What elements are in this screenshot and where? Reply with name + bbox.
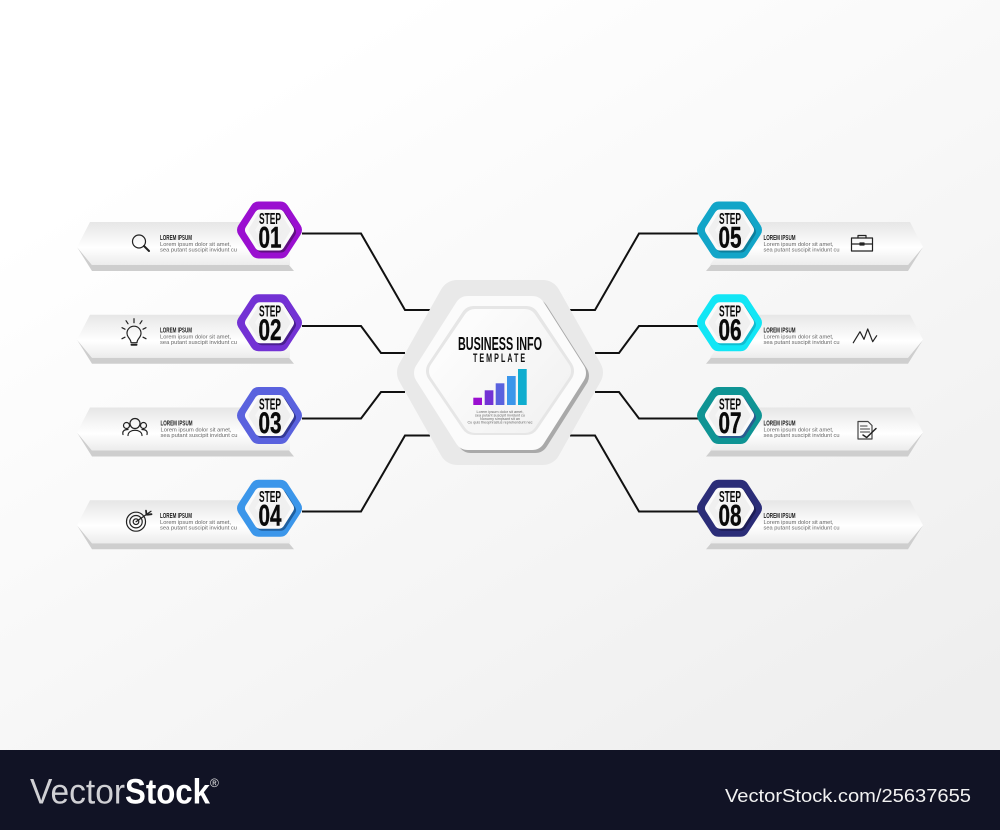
footer url: VectorStock.com/25637655 [725,785,971,806]
text 06: Lorem ipsum dolor sit amet, [764,335,834,341]
hexagon 08: STEP [719,489,741,506]
center title: BUSINESS INFO [458,333,542,354]
hexagon 01 [246,210,294,254]
footer logo: Stock [125,772,210,812]
icon: light bulb [122,319,146,345]
center body text: sea putant suscipit invidunt cu [475,414,525,418]
icon: briefcase [852,236,872,251]
step 08 [706,488,923,549]
banner 01 [77,222,294,271]
step 05 [706,210,923,271]
text 05: LOREM IPSUM [764,233,796,242]
step 01 [77,210,294,271]
text 03: LOREM IPSUM [160,418,192,428]
text 02: sea putant suscipit invidunt cu [160,340,237,346]
icon: checklist document [858,422,876,439]
center subtitle: TEMPLATE [473,352,527,366]
text 06 [764,326,840,346]
text 07: LOREM IPSUM [764,418,796,428]
banner 06 [706,315,923,364]
hexagon 07 [706,396,754,440]
text 05 [764,233,840,254]
hexagon 04: 04 [258,500,282,533]
text 05: sea putant suscipit invidunt cu [764,248,840,254]
text 01 [160,233,237,254]
text 01: Lorem ipsum dolor sit amet, [160,242,231,248]
hexagon 05: STEP [719,211,741,228]
icon: zigzag chart [853,329,877,343]
hexagon 06: 06 [718,314,742,347]
text 02: LOREM IPSUM [160,326,192,335]
footer bar [0,750,1000,830]
bar chart [473,369,527,405]
step 02 [77,303,294,364]
banner 08 [706,500,923,549]
icon: people [123,418,147,436]
text 05: Lorem ipsum dolor sit amet, [764,242,834,248]
text 07: Lorem ipsum dolor sit amet, [764,428,834,434]
banner 04 [77,500,294,549]
text 04 [160,511,237,532]
step 03 [77,396,294,456]
hexagon 07: 07 [718,407,742,440]
text 08: LOREM IPSUM [764,511,796,520]
center body text [468,410,533,424]
hexagon 08 [706,488,754,533]
icon: magnifier [132,235,149,251]
step 04 [77,488,294,549]
center body text: Nonumy simpsant sit an [480,417,520,421]
hexagon 05 [706,210,754,254]
hexagon 07: STEP [719,396,741,414]
hexagon 02 [246,303,294,347]
hexagon 05: 05 [718,222,742,254]
text 04: LOREM IPSUM [160,511,192,520]
hexagon 03: 03 [258,407,282,440]
text 03: Lorem ipsum dolor sit amet, [160,428,232,434]
text 08: sea putant suscipit invidunt cu [764,526,840,532]
text 08: Lorem ipsum dolor sit amet, [764,520,834,526]
step 06 [706,303,923,364]
footer logo: Vector [30,772,125,812]
text 02: Lorem ipsum dolor sit amet, [160,335,231,341]
text 08 [764,511,840,532]
step 07 [706,396,923,456]
text 06: sea putant suscipit invidunt cu [764,340,840,346]
connector lines [302,234,698,512]
text 01: LOREM IPSUM [160,233,192,242]
banner 05 [706,222,923,271]
footer logo [30,772,219,812]
text 07 [764,418,840,439]
central hexagon [415,298,585,447]
hexagon 06 [706,303,754,347]
hexagon 06: STEP [719,304,741,321]
text 01: sea putant suscipit invidunt cu [160,248,237,254]
banner 02 [77,315,294,364]
hexagon 08: 08 [718,500,742,533]
hexagon 04 [246,488,294,533]
hexagon 02: STEP [259,304,281,321]
banner 03 [77,408,294,456]
text 06: LOREM IPSUM [764,326,796,335]
hexagon 02: 02 [258,314,282,347]
hexagon 03 [246,396,294,440]
text 03: sea putant suscipit invidunt cu [160,433,238,439]
center body text: Cu quis theophrastus reprehendunt nec [468,420,533,424]
hexagon 04: STEP [259,489,281,506]
footer logo: ® [210,776,219,790]
text 04: Lorem ipsum dolor sit amet, [160,520,231,526]
text 02 [160,326,237,346]
banner 07 [706,408,923,456]
hexagon 01: STEP [259,211,281,228]
icon: target [126,511,152,531]
text 07: sea putant suscipit invidunt cu [764,433,840,439]
hexagon 03: STEP [259,396,281,414]
hexagon 01: 01 [258,222,282,254]
text 03 [160,418,238,439]
center body text: Lorem ipsum dolor sit amet, [476,410,524,414]
text 04: sea putant suscipit invidunt cu [160,526,237,532]
